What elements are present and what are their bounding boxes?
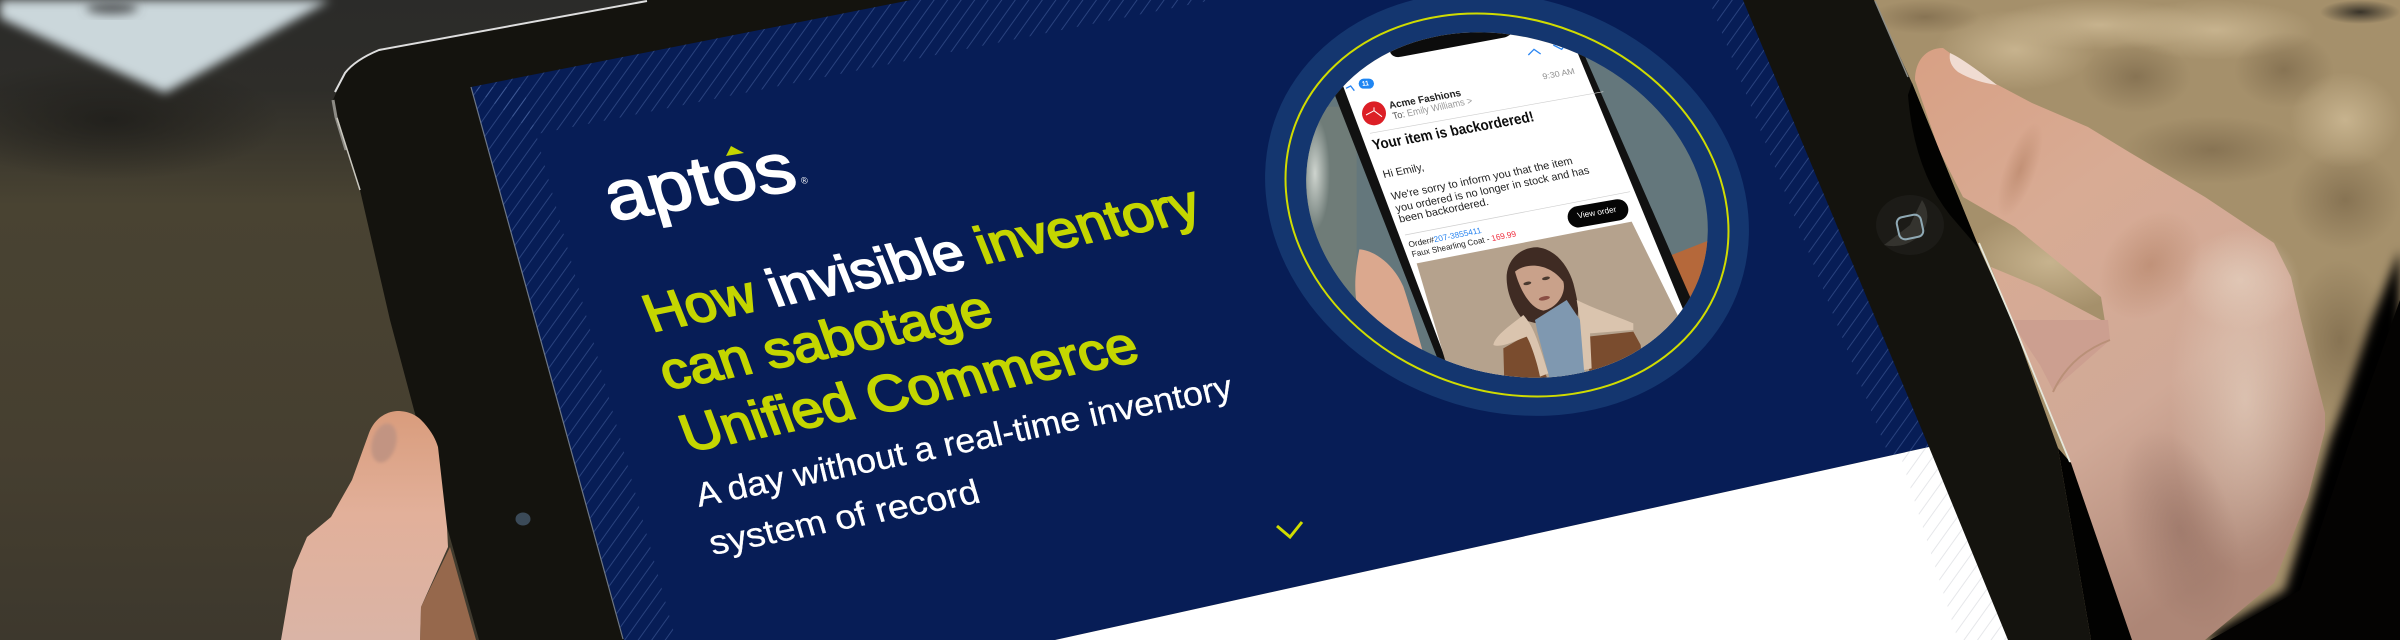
sender: Acme Fashions (1388, 88, 1463, 112)
home button (1876, 195, 1944, 255)
tablet body (333, 0, 2091, 640)
subheading line 1: A day without a real-time inventory (692, 368, 1236, 515)
model eyes and lips (1523, 276, 1550, 301)
mail header icons (1346, 43, 1567, 91)
view order button: View order (1576, 205, 1618, 220)
headline line 2: can sabotage (651, 280, 1000, 402)
phone screen (1343, 32, 1683, 378)
time: 9:30 AM (1541, 67, 1576, 81)
blurred background right (1860, 0, 2400, 640)
body line 3: been backordered. (1397, 196, 1490, 226)
headline line 1: How invisible inventory (634, 175, 1209, 343)
model hair (1507, 247, 1578, 323)
model face (1515, 266, 1564, 311)
thumbnail (1950, 53, 1997, 85)
screen left edge line (471, 87, 623, 639)
left finger (281, 411, 448, 640)
right hand (1915, 48, 2325, 640)
scroll chevron (1277, 522, 1302, 537)
order number: Order#207-3855411 (1407, 226, 1483, 249)
email body (1390, 155, 1591, 226)
body line 2: you ordered is no longer in stock and has (1394, 165, 1591, 215)
screen: navy hero (471, 0, 1929, 640)
body line 1: We're sorry to inform you that the item (1390, 155, 1574, 203)
left thumbnail (367, 421, 401, 465)
logo: aptos: ® (800, 175, 809, 186)
phone body (1335, 32, 1690, 378)
right fingertip (1672, 241, 1708, 300)
sender avatar (1362, 101, 1386, 125)
screen: white lower section (1055, 447, 2008, 640)
divider lines (1370, 92, 1630, 235)
headline (634, 175, 1209, 463)
model shirt (1535, 300, 1585, 380)
subheading (692, 368, 1236, 563)
headline line 3: Unified Commerce (671, 316, 1146, 463)
tablet edge highlights (333, 1, 2070, 462)
email title: Your item is backordered! (1371, 109, 1536, 154)
blurred background left (0, 0, 1000, 640)
view order button (1568, 199, 1628, 228)
palm fold (2010, 320, 2110, 390)
thumb shadow on tablet (1908, 83, 1980, 250)
unread badge (1359, 79, 1374, 89)
model jacket (1503, 332, 1641, 378)
tablet shadow strip (2058, 448, 2132, 640)
camera dot (516, 512, 530, 526)
stripe bands (471, 0, 2008, 640)
photo background (1306, 32, 1708, 362)
unread badge: 11 (1361, 80, 1370, 88)
subheading line 2: system of record (704, 473, 984, 563)
phone image in circle (1306, 32, 1708, 378)
phone notch (1390, 32, 1510, 58)
product photo (1416, 222, 1678, 378)
dark sleeve at lower right (2200, 250, 2400, 640)
second finger behind left thumb (420, 547, 476, 640)
thumb (1355, 249, 1422, 350)
circle outer band (1202, 0, 1812, 486)
model collar (1493, 300, 1633, 377)
greeting: Hi Emily, (1381, 162, 1426, 181)
logo: aptos: aptos (594, 128, 804, 236)
recipient: To: Emily Williams > (1391, 96, 1474, 122)
circle yellow ring (1228, 0, 1786, 460)
product line: Faux Shearling Coat - 169.99 (1411, 229, 1518, 259)
